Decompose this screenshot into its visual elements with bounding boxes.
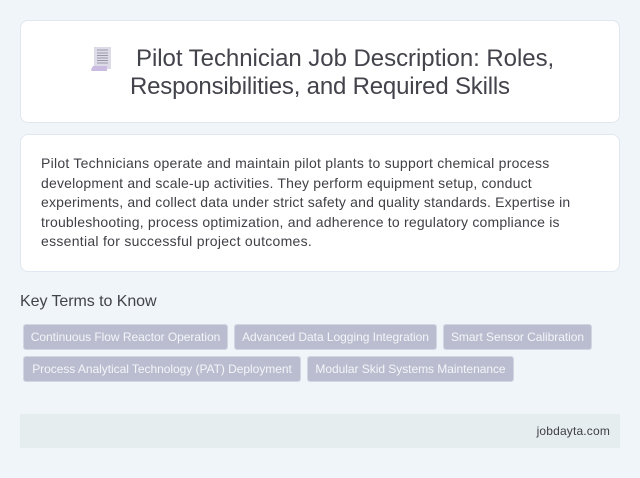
icon: document scroll <box>91 47 111 71</box>
title card <box>20 20 620 123</box>
title <box>130 45 554 100</box>
summary card <box>20 134 620 272</box>
tag <box>23 324 228 350</box>
tag: Continuous Flow Reactor Operation <box>31 330 220 344</box>
footer bar <box>20 414 620 448</box>
summary text: experiments, and collect data under strict safety and quality standards. Expertise in <box>41 194 570 210</box>
tag <box>23 356 301 382</box>
summary text: troubleshooting, process optimization, and adherence to regulatory compliance is <box>41 214 560 230</box>
tag: Advanced Data Logging Integration <box>242 330 429 344</box>
tag <box>443 324 592 350</box>
tag <box>307 356 514 382</box>
heading: key terms: Key Terms to Know <box>20 293 157 310</box>
title: Responsibilities, and Required Skills <box>130 73 510 100</box>
tag: Process Analytical Technology (PAT) Deployment <box>32 362 292 376</box>
tag <box>234 324 437 350</box>
title: Pilot Technician Job Description: Roles, <box>136 45 554 72</box>
summary text: essential for successful project outcomes. <box>41 233 312 249</box>
summary text: development and scale-up activities. They perform equipment setup, conduct <box>41 174 532 190</box>
summary text: Pilot Technicians operate and maintain pilot plants to support chemical process <box>41 155 549 171</box>
summary text <box>41 155 570 249</box>
tag: Modular Skid Systems Maintenance <box>315 362 506 376</box>
footer site name: jobdayta.com <box>537 424 610 438</box>
tag: Smart Sensor Calibration <box>451 330 584 344</box>
tag list <box>23 324 592 382</box>
